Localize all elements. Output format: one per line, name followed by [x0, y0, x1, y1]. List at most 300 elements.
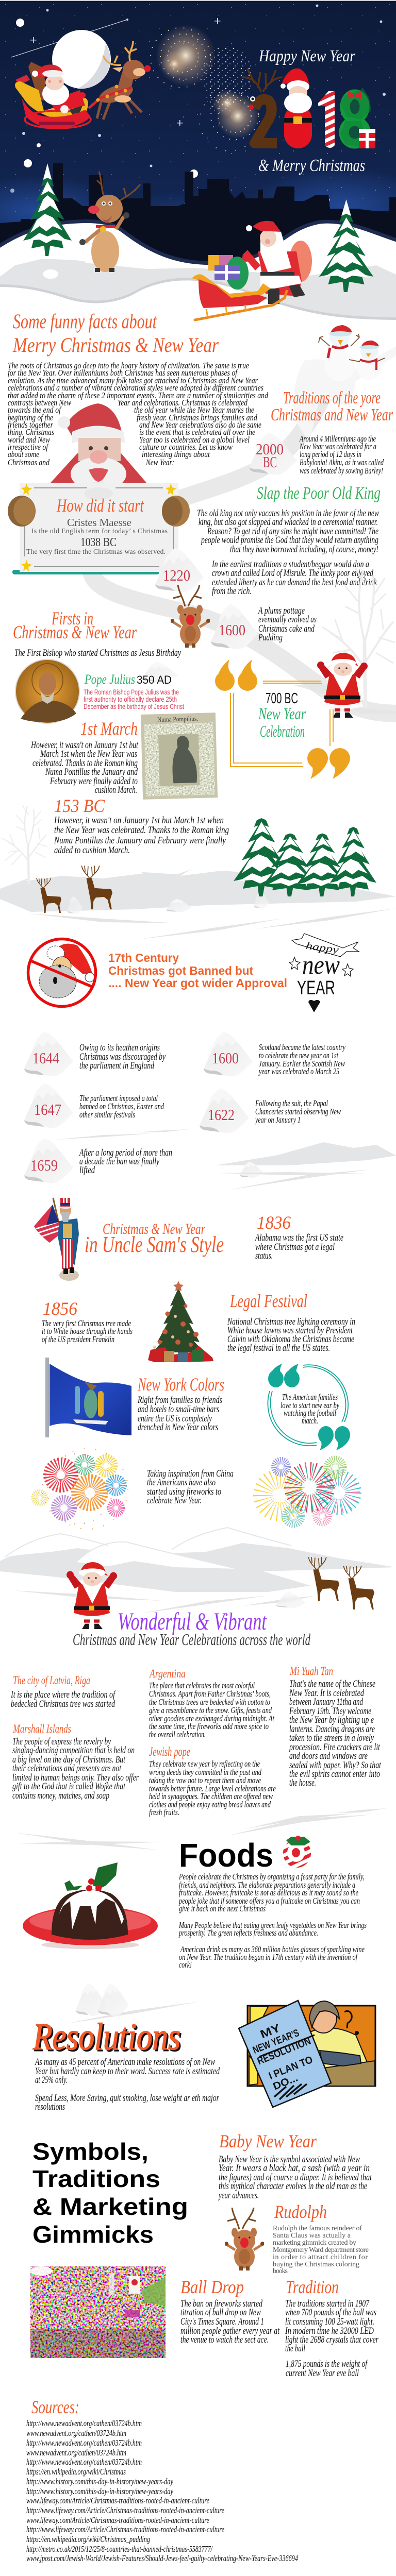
timeline: 1647 — [24, 1083, 164, 1128]
panel: Uncle Sam — [34, 1198, 355, 1529]
trail road — [91, 379, 396, 714]
timeline: 1647: other similar festivals — [79, 1110, 135, 1120]
heading: sources: Sources: — [31, 2397, 79, 2417]
snow bubbles — [76, 1984, 129, 2016]
list: source urls: http://www.history.com/this-day-in-history/new-years-day — [26, 2477, 174, 2486]
text: resolutions — [35, 2057, 220, 2112]
text: New York: Right from families to friends — [137, 1395, 222, 1405]
fact: 1856: it to White house through the hands — [42, 1326, 133, 1336]
heading: wonderful vibrant — [73, 1608, 311, 1649]
text: 1st March: However, it wasn't on January 1st but — [30, 740, 139, 751]
item: Ball Drop: The ban on fireworks started — [180, 2299, 263, 2309]
timeline: 1600: year was celebrated o March 25 — [258, 1066, 339, 1076]
image: New York flag — [45, 1358, 131, 1437]
text: foods sparkling wine: cork! — [179, 1960, 192, 1970]
cartoon: new year's resolution: I PLAN TO — [267, 2054, 315, 2082]
image: Uncle Sam figure — [34, 1198, 79, 1281]
text: Pope Julius — [84, 688, 184, 710]
item: Tradition: Tradition — [286, 2277, 339, 2297]
lettering: happy new year: new — [302, 951, 340, 980]
fact: 1836: Alabama was the first US state — [255, 1233, 343, 1243]
quote: 700 BC — [215, 653, 396, 779]
text: New York: and hotels to small-time bars — [138, 1404, 219, 1415]
timeline: 1622: Following the suit, the Papal — [255, 1098, 328, 1108]
quote: American families football: love to start new ear by — [280, 1400, 339, 1410]
intro text: and New Year celebrations also do the same — [139, 420, 261, 430]
text: resolutions: Year but hardly can keep to their word. Success rate is estimated — [35, 2066, 220, 2077]
text: New York: drenched in New Year colors — [138, 1422, 218, 1433]
list: source urls: http://www.newadvent.org/cathen/03724b.htm — [26, 2438, 142, 2448]
column: Chinese New Year — [289, 1665, 382, 1788]
heading: Resolutions: Resolutions — [34, 2018, 182, 2060]
illustration: fireworks right — [263, 1460, 353, 1523]
shooting star — [11, 19, 128, 57]
column: Argentina: give a resemblance to the snow. Gifts, feasts and — [149, 1705, 272, 1715]
icon: close quote — [307, 748, 350, 779]
timeline: 1659: After a long period of more than — [78, 1148, 172, 1158]
heading: symbols: Traditions — [32, 2165, 160, 2192]
santa flying on sleigh — [15, 30, 151, 129]
portrait: Pope Julius — [15, 659, 80, 724]
column: Argentina: the Christmas trees are bedecked with cotton to — [149, 1697, 270, 1707]
reindeer standing — [79, 172, 140, 272]
heading: ban: .... New Year got wider Approval — [108, 976, 287, 990]
fact: 1856 — [42, 1298, 133, 1344]
text: 153 BC — [54, 816, 229, 856]
fact: 1836: status. — [255, 1251, 273, 1261]
column: Argentina — [148, 1667, 274, 1739]
quote: American families football: match. — [302, 1416, 318, 1426]
icon: banned santa — [28, 939, 96, 1007]
cartoon: new year's resolution — [239, 2001, 375, 2107]
list: source urls: www.lifeway.com/Article/Christmas-traditions-rooted-in-ancient-culture — [26, 2496, 209, 2505]
panel: traditions of the yore — [155, 325, 396, 709]
intro text: culture or countries. Let us know — [139, 442, 233, 452]
tree: bare winter tree — [322, 568, 395, 709]
subheading: first bishop: The First Bishop who started Christmas as Jesus Birthday — [14, 648, 182, 658]
text: lord of misrule — [211, 560, 377, 597]
fact: 1856: The very first Christmas tree made — [42, 1318, 131, 1328]
item: Rudolph: Montgomery Ward department store — [273, 2246, 369, 2254]
text: Pope Julius: first authority to officially declare 25th — [84, 696, 177, 703]
heading: funny facts — [12, 310, 219, 357]
fact: 1038 BC: 1038 BC — [80, 536, 117, 549]
city skyline — [0, 163, 396, 268]
panel: 153 BC scene — [0, 795, 396, 1140]
column: Latvia — [10, 1674, 116, 1709]
text: 153 BC: However, it wasn't on January 1st but March 1st when — [54, 816, 224, 826]
item: Rudolph: books — [273, 2267, 288, 2275]
list: source urls: http://metro.co.uk/2015/12/25/8-countries-that-banned-christmas-5583777/ — [26, 2544, 213, 2554]
text: New York: entire the US is completely — [138, 1414, 212, 1424]
heading: funny facts: Some funny facts about — [13, 310, 157, 333]
heading: wonderful vibrant: Wonderful & Vibrant — [118, 1608, 267, 1635]
text: 1st March: Numa Pontillus the January and — [45, 767, 138, 777]
snow hills — [0, 860, 396, 1140]
column: Chinese New Year: the house. — [289, 1778, 316, 1788]
intro text: interesting things about — [142, 449, 210, 459]
column: Jewish pope: wrong deeds they committed in the past and — [149, 1767, 262, 1777]
heading: Resolutions: Resolutions — [32, 2016, 180, 2058]
heading: Pope Julius 350 AD: Pope Julius — [84, 672, 135, 687]
timeline: 1644: 1644 — [32, 1049, 59, 1067]
column: Marshall Islands: Marshall Islands — [12, 1722, 71, 1735]
snow bubble behind pope heading — [142, 662, 178, 682]
panel: 17th century ban — [24, 934, 396, 1190]
item: Ball Drop: Ball Drop — [180, 2277, 244, 2297]
quote: American families football: watching the football — [284, 1408, 336, 1418]
timeline: 1659 — [24, 1139, 172, 1183]
text: resolutions: resolutions — [35, 2102, 65, 2112]
column: Jewish pope: fresh fruits. — [149, 1807, 179, 1817]
santa and sleigh on hill — [192, 221, 312, 320]
timeline: 1644: Owing to its heathen origins — [79, 1043, 160, 1053]
text: 153 BC: Numa Pontillus the January and February were finally — [54, 836, 226, 846]
image: Numa Pompilius engraving: Numa Pompilius. — [157, 715, 198, 723]
year marker: 2000 BC: 2000 — [256, 440, 284, 458]
snow hills — [0, 1528, 396, 2024]
fact: 1038 BC: The very first time the Christmas was observed. — [26, 548, 166, 555]
column: Jewish pope: taking the vow not to repeat them and move — [149, 1775, 261, 1785]
panel: intro — [8, 310, 396, 714]
column: Chinese New Year: Mi Yuah Tan — [289, 1665, 333, 1677]
item: Rudolph: buying the Christmas coloring — [273, 2261, 359, 2268]
fact: 1836: 1836 — [257, 1212, 291, 1233]
cartoon: new year's resolution: NEW YEAR'S — [251, 2027, 301, 2056]
text: legal festival: National Christmas tree lighting ceremony in — [227, 1317, 355, 1327]
column: Jewish pope: held in synagogues. The children are offered new — [149, 1791, 273, 1801]
text: legal festival: White house lawns was started by President — [227, 1326, 353, 1336]
heading: Happy New Year: Happy New Year — [258, 46, 355, 65]
list: source urls: www.lifeway.com/Article/Christmas-traditions-rooted-in-ancient-culture — [26, 2515, 209, 2525]
list: source urls — [26, 2418, 298, 2563]
fireworks — [151, 25, 259, 151]
column: Latvia: bedecked Christmas tree was started — [11, 1699, 116, 1709]
text: Pope Julius: The Roman Bishop Pope Julius was the — [84, 688, 179, 696]
column: Jewish pope: towards better future. Large level celebrations are — [149, 1784, 276, 1793]
item: Baby New Year — [218, 2131, 372, 2201]
column: Marshall Islands: The people of express the revelry by — [12, 1737, 111, 1747]
timeline: 1647: 1647 — [34, 1100, 61, 1118]
panel: sources — [26, 2397, 298, 2563]
list: source urls: https://en.wikipedia.org/wiki/Christmas — [26, 2467, 126, 2477]
heading: ban: Christmas got Banned but — [108, 964, 253, 977]
column: Marshall Islands: gift to the God that is called Wojke that — [12, 1782, 126, 1792]
column: Chinese New Year: and doors and windows are — [289, 1751, 368, 1761]
item: Rudolph: Santa Claus was actually a — [273, 2232, 351, 2240]
item: Ball Drop: million people gather every year at — [180, 2326, 280, 2336]
image: Numa Pompilius engraving — [141, 713, 218, 800]
intro text: celebrations and a number of vibrant celebration styles were adopted by different countries — [8, 383, 263, 393]
heading: and Merry Christmas: & Merry Christmas — [258, 156, 365, 175]
timeline: 1659: a decade the ban was finally — [79, 1157, 160, 1167]
timeline: 1644 — [24, 1032, 166, 1076]
text: legal festival: the legal festival in all the US states. — [227, 1343, 330, 1353]
timeline: 1600: 1600 — [212, 1049, 239, 1067]
fact: 1038 BC — [26, 536, 166, 555]
text: foods sparkling wine — [179, 1944, 365, 1970]
item: Tradition: current New Year eve ball — [286, 2368, 359, 2379]
timeline: 1600 — [204, 1032, 345, 1076]
heading: traditions — [271, 388, 393, 425]
column: Marshall Islands: their celebrations and presents are not — [12, 1764, 122, 1774]
item: Ball Drop: titration of ball drop on New — [180, 2308, 261, 2318]
text: 1st March: February were finally added to — [50, 776, 138, 787]
panel: resolutions — [32, 1984, 375, 2112]
heading: funny facts: Merry Christmas & New Year — [12, 333, 219, 357]
quote: 700 BC: Celebration — [260, 722, 305, 740]
panel: firsts in Christmas — [13, 608, 396, 800]
fact: 1856: of the US president Franklin — [42, 1334, 114, 1344]
text: 1st March: celebrated. Thanks to the Roman king — [32, 758, 138, 769]
intro text: Christmas and — [8, 457, 50, 467]
text: foods vegetables: prosperity. The green reflects freshness and abundance. — [178, 1928, 318, 1938]
text: resolutions: Spend Less, More Saving, quit smoking, lose weight ar eth major — [35, 2093, 220, 2104]
column: Marshall Islands: contains money, matches, and soap — [12, 1791, 109, 1801]
text: plums pottage: A plums pottage — [257, 606, 305, 616]
item: Baby New Year: Baby New Year — [219, 2131, 317, 2151]
year marker: 2000 BC: BC — [263, 453, 277, 471]
text: 153 BC: the New Year was celebrated. Thanks to the Roman king — [54, 825, 229, 836]
heading: ban — [108, 951, 287, 990]
moon-like sack — [52, 30, 111, 89]
cartoon: new year's resolution: MY — [258, 2021, 283, 2041]
quote: American families football: The American families — [282, 1392, 338, 1402]
intro text: world and New — [8, 435, 50, 445]
intro text: Year too is celebrated on a global level — [139, 435, 250, 445]
text: foods fruitcake: give it back on the next Christmas — [179, 1904, 266, 1913]
text: fireworks — [147, 1469, 234, 1506]
year marker: 1600 — [211, 604, 258, 649]
text: plums pottage — [257, 606, 317, 643]
list: source urls: www.newadvent.org/cathen/03724b.htm — [26, 2448, 126, 2458]
quote: 700 BC: 700 BC — [266, 690, 298, 707]
panel: wonderful and vibrant — [0, 1528, 396, 2024]
deer pair — [308, 1557, 374, 1609]
column: Marshall Islands: limited to human beings only. They also offer — [12, 1773, 139, 1783]
reindeer pulling — [89, 41, 151, 120]
column: Jewish pope — [149, 1745, 276, 1817]
intro text — [8, 361, 269, 467]
panel: symbols — [30, 2131, 379, 2379]
timeline: 1600: to celebrate the new year on 1st — [259, 1050, 338, 1060]
column: Jewish pope: clothes and people enjoy eating bread loaves and — [149, 1800, 271, 1809]
timeline: 1600: January. Earlier the Scottish New — [259, 1059, 345, 1069]
tree: bare left — [2, 805, 47, 884]
timeline: 1644: Christmas was discouraged by — [79, 1052, 166, 1062]
heading: New York Colors: New York Colors — [137, 1374, 224, 1395]
fact: Cristes Maesse: Cristes Maesse — [67, 516, 131, 529]
list: source urls: www.newadvent.org/cathen/03724b.htm — [26, 2428, 126, 2438]
text: 1st March: cushion March. — [95, 785, 137, 795]
list: source urls: http://www.lifeway.com/Article/Christmas-traditions-rooted-in-ancient-culture — [26, 2505, 224, 2515]
lettering: happy new year: happy — [305, 940, 339, 956]
text: babylonia — [299, 434, 384, 476]
heading: 1st March: 1st March — [80, 718, 138, 739]
snowmen — [294, 325, 396, 443]
text: fireworks: the Americans have also — [147, 1478, 216, 1488]
item: Tradition: the ball — [285, 2344, 305, 2354]
heading: ban: 17th Century — [108, 951, 179, 964]
list: source urls: https://en.wikipedia.org/wiki/Christmas_pudding — [26, 2534, 150, 2544]
heading: How did it start: How did it start — [56, 495, 144, 516]
text: foods vegetables — [178, 1920, 367, 1938]
heading: symbols: Gimmicks — [32, 2221, 154, 2248]
text: plums pottage: eventually evolved as — [258, 615, 317, 625]
column: Argentina: Christmas. Apart from Father Christmas' boots, — [149, 1689, 271, 1699]
image: decorated Christmas tree — [148, 1281, 213, 1362]
heading: firsts: Firsts in — [51, 608, 93, 629]
timeline: 1622: 1622 — [208, 1106, 235, 1124]
panel: hero night sky — [0, 0, 396, 330]
tree left — [23, 163, 72, 256]
text: fireworks: started using fireworks to — [147, 1487, 221, 1497]
column: Marshall Islands — [12, 1722, 139, 1801]
intro text: that added to the charm of these 2 important events. There are a number of similarities and — [8, 391, 269, 400]
column: Argentina: Argentina — [148, 1667, 186, 1680]
intro text: thing. Christmas — [8, 427, 54, 437]
heading: Uncle Sam: in Uncle Sam's Style — [85, 1232, 224, 1257]
timeline: 1622: Chanceries started observing New — [255, 1107, 341, 1116]
list: source urls: www.jpost.com/Jewish-World/Jewish-Features/Should-Jews-feel-guilty-celebrating-New-Years-Eve-336694 — [26, 2553, 298, 2563]
fact: Cristes Maesse: Is the old English term for today’ s Christmas — [31, 527, 168, 535]
heading: symbols — [32, 2138, 188, 2248]
tree right — [319, 199, 373, 292]
text: plums pottage: Pudding — [258, 633, 283, 643]
heading: firsts: Christmas & New Year — [13, 622, 137, 642]
illustration: fireworks left — [35, 1449, 128, 1529]
text: fireworks: celebrate New Year. — [147, 1496, 202, 1506]
intro text: evolution. As the time advanced many folk tales got attached to Christmas and New Year — [8, 376, 258, 385]
item: Tradition — [285, 2277, 379, 2379]
item: Ball Drop — [180, 2277, 280, 2345]
lettering: happy new year — [289, 934, 359, 1012]
text: old king — [197, 509, 379, 555]
heading: symbols: & Marketing — [32, 2193, 188, 2220]
icon: santa — [67, 1562, 117, 1629]
quote: American families football — [268, 1364, 350, 1450]
timeline: 1622: year on January 1 — [255, 1115, 301, 1125]
item: Rudolph: Rudolph the famous reindeer of — [273, 2225, 362, 2232]
santa holding sign — [8, 403, 190, 574]
intro text: contrasts between New — [8, 398, 71, 408]
deer pair — [37, 866, 112, 913]
timeline: 1659: 1659 — [30, 1156, 58, 1174]
item: Ball Drop: City's Times Square. Around 1 — [180, 2317, 264, 2327]
item: Rudolph — [273, 2201, 369, 2275]
heading: Uncle Sam — [85, 1221, 224, 1257]
fact: 1836 — [255, 1212, 343, 1261]
fact: 1856: 1856 — [43, 1298, 77, 1319]
icon: reindeer — [170, 585, 210, 648]
intro text: the old year while the New Year marks the — [134, 405, 254, 415]
column: Jewish pope: Jewish pope — [149, 1745, 190, 1759]
timeline: 1647: banned on Christmas, Easter and — [79, 1101, 164, 1111]
column: Jewish pope: They celebrate new year by reflecting on the — [149, 1759, 260, 1769]
heading: Foods: Foods — [179, 1837, 273, 1874]
list: source urls: http://www.newadvent.org/cathen/03724b.htm — [26, 2457, 142, 2467]
item: Rudolph: Rudolph — [274, 2201, 327, 2222]
year marker: 2000 BC — [249, 433, 297, 475]
item: Ball Drop: the venue to watch the sect ace. — [180, 2335, 269, 2345]
fact: 1836: where Christmas got a legal — [255, 1242, 335, 1252]
text: foods fruitcake — [178, 1872, 365, 1913]
timeline: 1622 — [200, 1089, 341, 1133]
column: Chinese New Year: New Year. It is celebrated — [289, 1688, 365, 1699]
intro text: The roots of Christmas go deep into the hoary history of civilization. The same is true — [8, 361, 249, 370]
image: Christmas pudding — [23, 1862, 158, 1949]
text: resolutions: As many as 45 percent of American make resolutions of on New — [35, 2057, 215, 2067]
item: Tradition: The traditions started in 1907 — [285, 2299, 370, 2309]
snow mountain right — [215, 1135, 396, 1190]
heading: Pope Julius 350 AD: 350 AD — [137, 673, 172, 686]
column: Marshall Islands: singing-dancing competition that is held on — [12, 1745, 135, 1756]
text: 1st March: March 1st when the New Year was — [40, 749, 137, 759]
list: source urls: http://www.lifeway.com/Article/Christmas-traditions-rooted-in-ancient-culture — [26, 2524, 224, 2534]
intro text: about some — [8, 449, 39, 459]
year marker: 1220: 1220 — [163, 566, 190, 584]
list: source urls: http://www.history.com/this-day-in-history/new-years-day — [26, 2486, 174, 2496]
text: legal festival: Calvin with Oklahoma the Christmas became — [227, 1334, 354, 1345]
heading: Legal Festival: Legal Festival — [229, 1291, 307, 1311]
year marker: 1220 — [155, 548, 204, 592]
column: Argentina: the overall celebration. — [149, 1730, 206, 1739]
timeline: 1600: Scotland became the latest country — [259, 1042, 345, 1052]
column: Latvia: It is the place where the tradition of — [10, 1690, 116, 1700]
text: babylonia: long period of 12 days in — [300, 449, 361, 459]
intro text: friends together — [8, 420, 53, 430]
intro text: Year and celebrations. Christmas is celebrated — [118, 398, 248, 408]
timeline: 1659: lifted — [79, 1165, 95, 1176]
column: Latvia: The city of Latvia, Riga — [13, 1674, 90, 1687]
text: legal festival — [227, 1317, 355, 1353]
text: plums pottage: Christmas cake and — [258, 624, 315, 634]
photo: Times Square crowd — [30, 2266, 166, 2358]
heading: 153 BC: 153 BC — [54, 795, 105, 816]
intro text: irrespective of — [8, 442, 49, 452]
cartoon: new year's resolution: RESOLUTION — [256, 2036, 312, 2067]
intro text: fresh year. Christmas brings families and — [137, 413, 258, 422]
item: Rudolph: marketing gimmick created by — [273, 2239, 356, 2247]
year marker: 1600: 1600 — [219, 621, 245, 639]
icon: plate with holly — [283, 1836, 311, 1868]
column: Argentina: the same time, the fireworks add more spice to — [149, 1721, 269, 1731]
snow dots and sparkles — [10, 4, 386, 222]
quote: 700 BC: New Year — [258, 704, 306, 723]
text: 1st March — [30, 740, 139, 795]
timeline: 1644: the parliament in England — [79, 1061, 155, 1071]
intro text: is the event that is celebrated all over the — [139, 427, 255, 437]
intro text: towards the end of — [8, 405, 62, 415]
text: lord of misrule: from the rich. — [212, 586, 252, 597]
heading: symbols: Symbols, — [32, 2138, 148, 2165]
panel: foods — [23, 1836, 367, 1970]
heading: Uncle Sam: Christmas & New Year — [103, 1221, 205, 1238]
column: Argentina: other goodies are exchanged during midnight. At — [149, 1714, 274, 1723]
list: source urls: http://www.newadvent.org/cathen/03724b.htm — [26, 2418, 142, 2428]
heading: firsts — [13, 608, 137, 642]
item: Baby New Year: year advances. — [218, 2191, 259, 2201]
text: resolutions: at 25% only. — [35, 2075, 68, 2086]
item: Tradition: 1,875 pounds is the weight of — [286, 2359, 368, 2369]
cartoon: new year's resolution: DO... — [271, 2072, 300, 2092]
intro text: for the New Year. Over millenniums both Christmas has seen numerous phases of — [8, 368, 238, 378]
icon: open quote — [215, 659, 257, 691]
text: 153 BC: added to cushion March. — [54, 845, 130, 856]
intro text: New Year: — [145, 457, 174, 467]
column: Marshall Islands: a big level on the day of Christmas. But — [12, 1755, 126, 1765]
column: Chinese New Year: between January 11tha and — [289, 1697, 364, 1707]
